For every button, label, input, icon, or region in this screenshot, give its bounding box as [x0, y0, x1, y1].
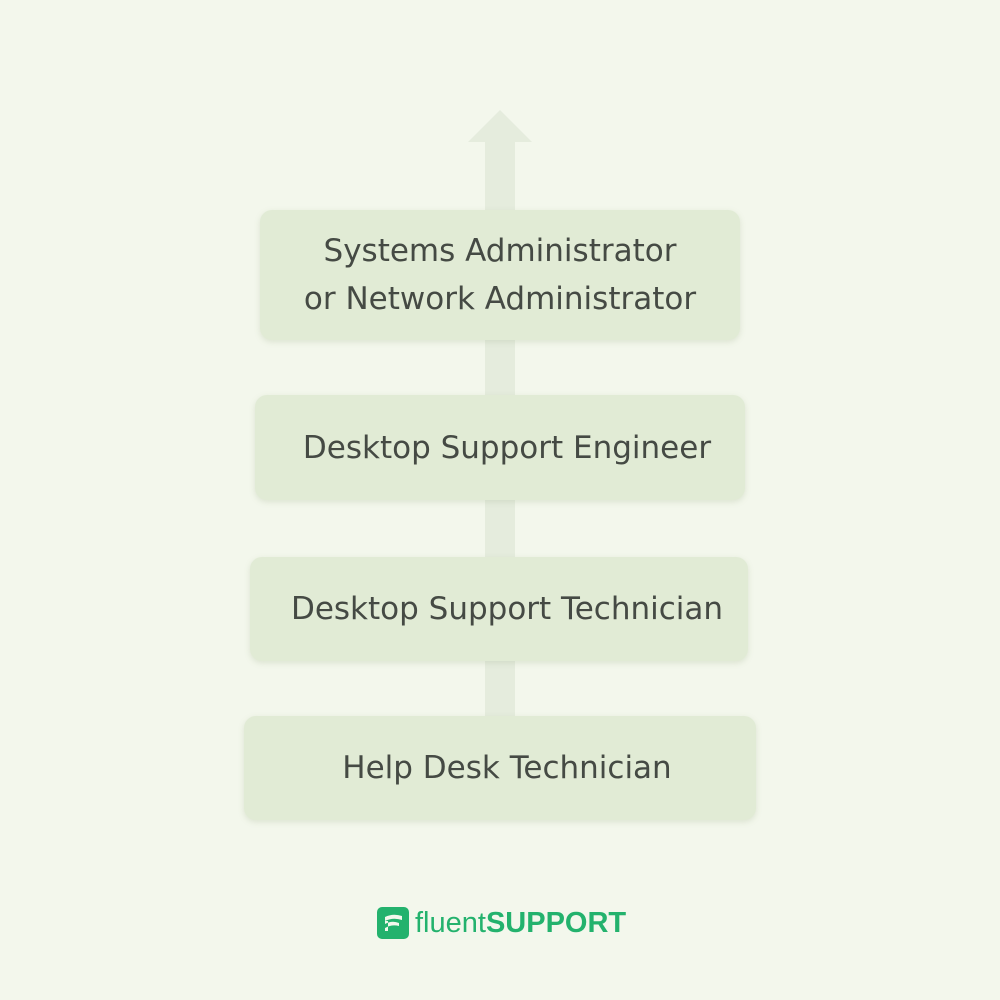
panel: Systems Administrator: Systems Administrator: [324, 233, 676, 269]
panel: Help Desk Technician: [244, 716, 756, 820]
panel: Desktop Support Engineer: [255, 395, 745, 500]
panel: Desktop Support Engineer: Desktop Support Engineer: [303, 430, 711, 466]
panel: Systems Administrator: or Network Administrator: [304, 281, 696, 317]
icon: logo mark: [377, 907, 409, 939]
panel: Desktop Support Technician: [250, 557, 748, 661]
panel: Desktop Support Technician: Desktop Support Technician: [291, 591, 723, 627]
panel: Systems Administrator: [260, 210, 740, 340]
panel: Help Desk Technician: Help Desk Technician: [342, 750, 672, 786]
brand text: fluentSUPPORT: [415, 906, 626, 938]
logo: [377, 906, 626, 939]
